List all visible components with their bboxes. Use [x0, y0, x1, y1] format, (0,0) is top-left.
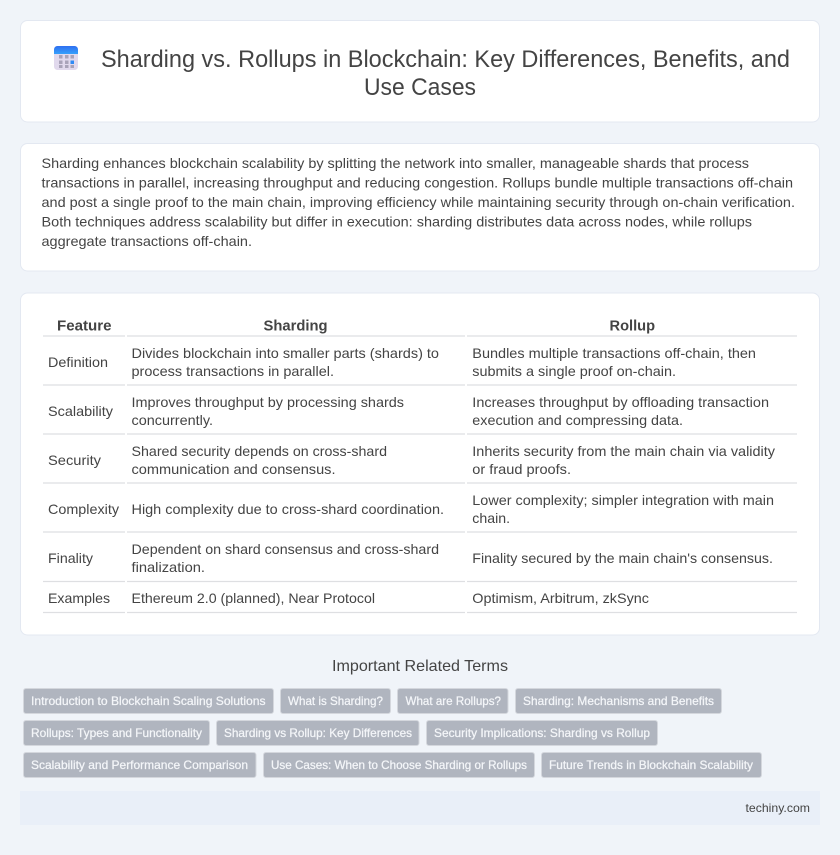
related term tags	[24, 688, 762, 778]
related term tags: What is Sharding?	[288, 694, 383, 708]
row: definition: Definition	[48, 354, 108, 370]
title: Use Cases	[364, 74, 476, 101]
panel: introduction text: Sharding enhances blockchain scalability by splitting the network into smaller, manageable shards that process	[42, 155, 749, 171]
panel: introduction text: transactions in parallel, increasing throughput and reducing congestion. Rollups bundle multiple transactions off-chain	[42, 174, 793, 190]
table header row: Feature	[57, 318, 112, 334]
row: complexity	[48, 492, 774, 526]
related term tags: Use Cases: When to Choose Sharding or Rollups	[271, 758, 527, 772]
footer	[20, 791, 820, 825]
related term tags: Future Trends in Blockchain Scalability	[549, 758, 753, 772]
row: complexity: High complexity due to cross-shard coordination.	[132, 501, 444, 517]
row: finality: finalization.	[132, 559, 205, 575]
row: scalability: concurrently.	[132, 412, 213, 428]
table header row: Sharding	[264, 318, 328, 334]
row: definition: Bundles multiple transactions off-chain, then	[472, 345, 756, 361]
row: complexity: Complexity	[48, 501, 119, 517]
row: examples: Examples	[48, 590, 110, 606]
row: security: or fraud proofs.	[472, 461, 571, 477]
related term tags: Rollups: Types and Functionality	[31, 726, 202, 740]
heading: important related terms: Important Related Terms	[332, 658, 508, 675]
related term tags: Security Implications: Sharding vs Rollup	[434, 726, 650, 740]
row: scalability: Improves throughput by processing shards	[132, 394, 404, 410]
table header row	[57, 318, 655, 334]
icon: calendar grid	[54, 46, 78, 70]
title: Sharding vs. Rollups in Blockchain: Key Differences, Benefits, and	[101, 46, 790, 73]
panel: introduction text: aggregate transactions off-chain.	[42, 233, 252, 249]
row: security: Inherits security from the main chain via validity	[472, 443, 775, 459]
footer: techiny.com	[746, 801, 810, 815]
row: examples	[48, 590, 649, 606]
row: complexity: chain.	[472, 510, 510, 526]
row: finality: Dependent on shard consensus and cross-shard	[132, 541, 439, 557]
row: definition	[48, 345, 756, 379]
panel: introduction text	[20, 144, 820, 271]
row: scalability	[48, 394, 769, 428]
panel: header	[20, 20, 820, 122]
table header row: Rollup	[610, 318, 655, 334]
row: security: Shared security depends on cross-shard	[132, 443, 387, 459]
panel: comparison table	[20, 293, 820, 635]
row: security	[48, 443, 775, 477]
row: scalability: Increases throughput by offloading transaction	[472, 394, 769, 410]
related term tags: What are Rollups?	[406, 694, 501, 708]
related term tags: Introduction to Blockchain Scaling Solutions	[31, 694, 266, 708]
row: finality: Finality secured by the main chain's consensus.	[472, 550, 773, 566]
panel: introduction text: and post a single proof to the main chain, improving efficiency while maintaining security through on-chain verification.	[42, 194, 795, 210]
title	[101, 46, 790, 101]
row: complexity: Lower complexity; simpler integration with main	[472, 492, 774, 508]
row: definition: Divides blockchain into smaller parts (shards) to	[132, 345, 439, 361]
row: definition: process transactions in parallel.	[132, 363, 334, 379]
row: scalability: Scalability	[48, 403, 113, 419]
related term tags: Sharding: Mechanisms and Benefits	[523, 694, 714, 708]
row: examples: Optimism, Arbitrum, zkSync	[472, 590, 649, 606]
row: scalability: execution and compressing data.	[472, 412, 683, 428]
row: examples: Ethereum 2.0 (planned), Near Protocol	[132, 590, 375, 606]
panel: introduction text: Both techniques address scalability but differ in execution: sharding distributes data across nodes, while rollups	[42, 213, 752, 229]
row: security: communication and consensus.	[132, 461, 336, 477]
related term tags: Scalability and Performance Comparison	[31, 758, 248, 772]
row: finality: Finality	[48, 550, 93, 566]
row: definition: submits a single proof on-chain.	[472, 363, 676, 379]
related term tags: Sharding vs Rollup: Key Differences	[224, 726, 412, 740]
row: security: Security	[48, 452, 101, 468]
row: finality	[48, 541, 773, 575]
